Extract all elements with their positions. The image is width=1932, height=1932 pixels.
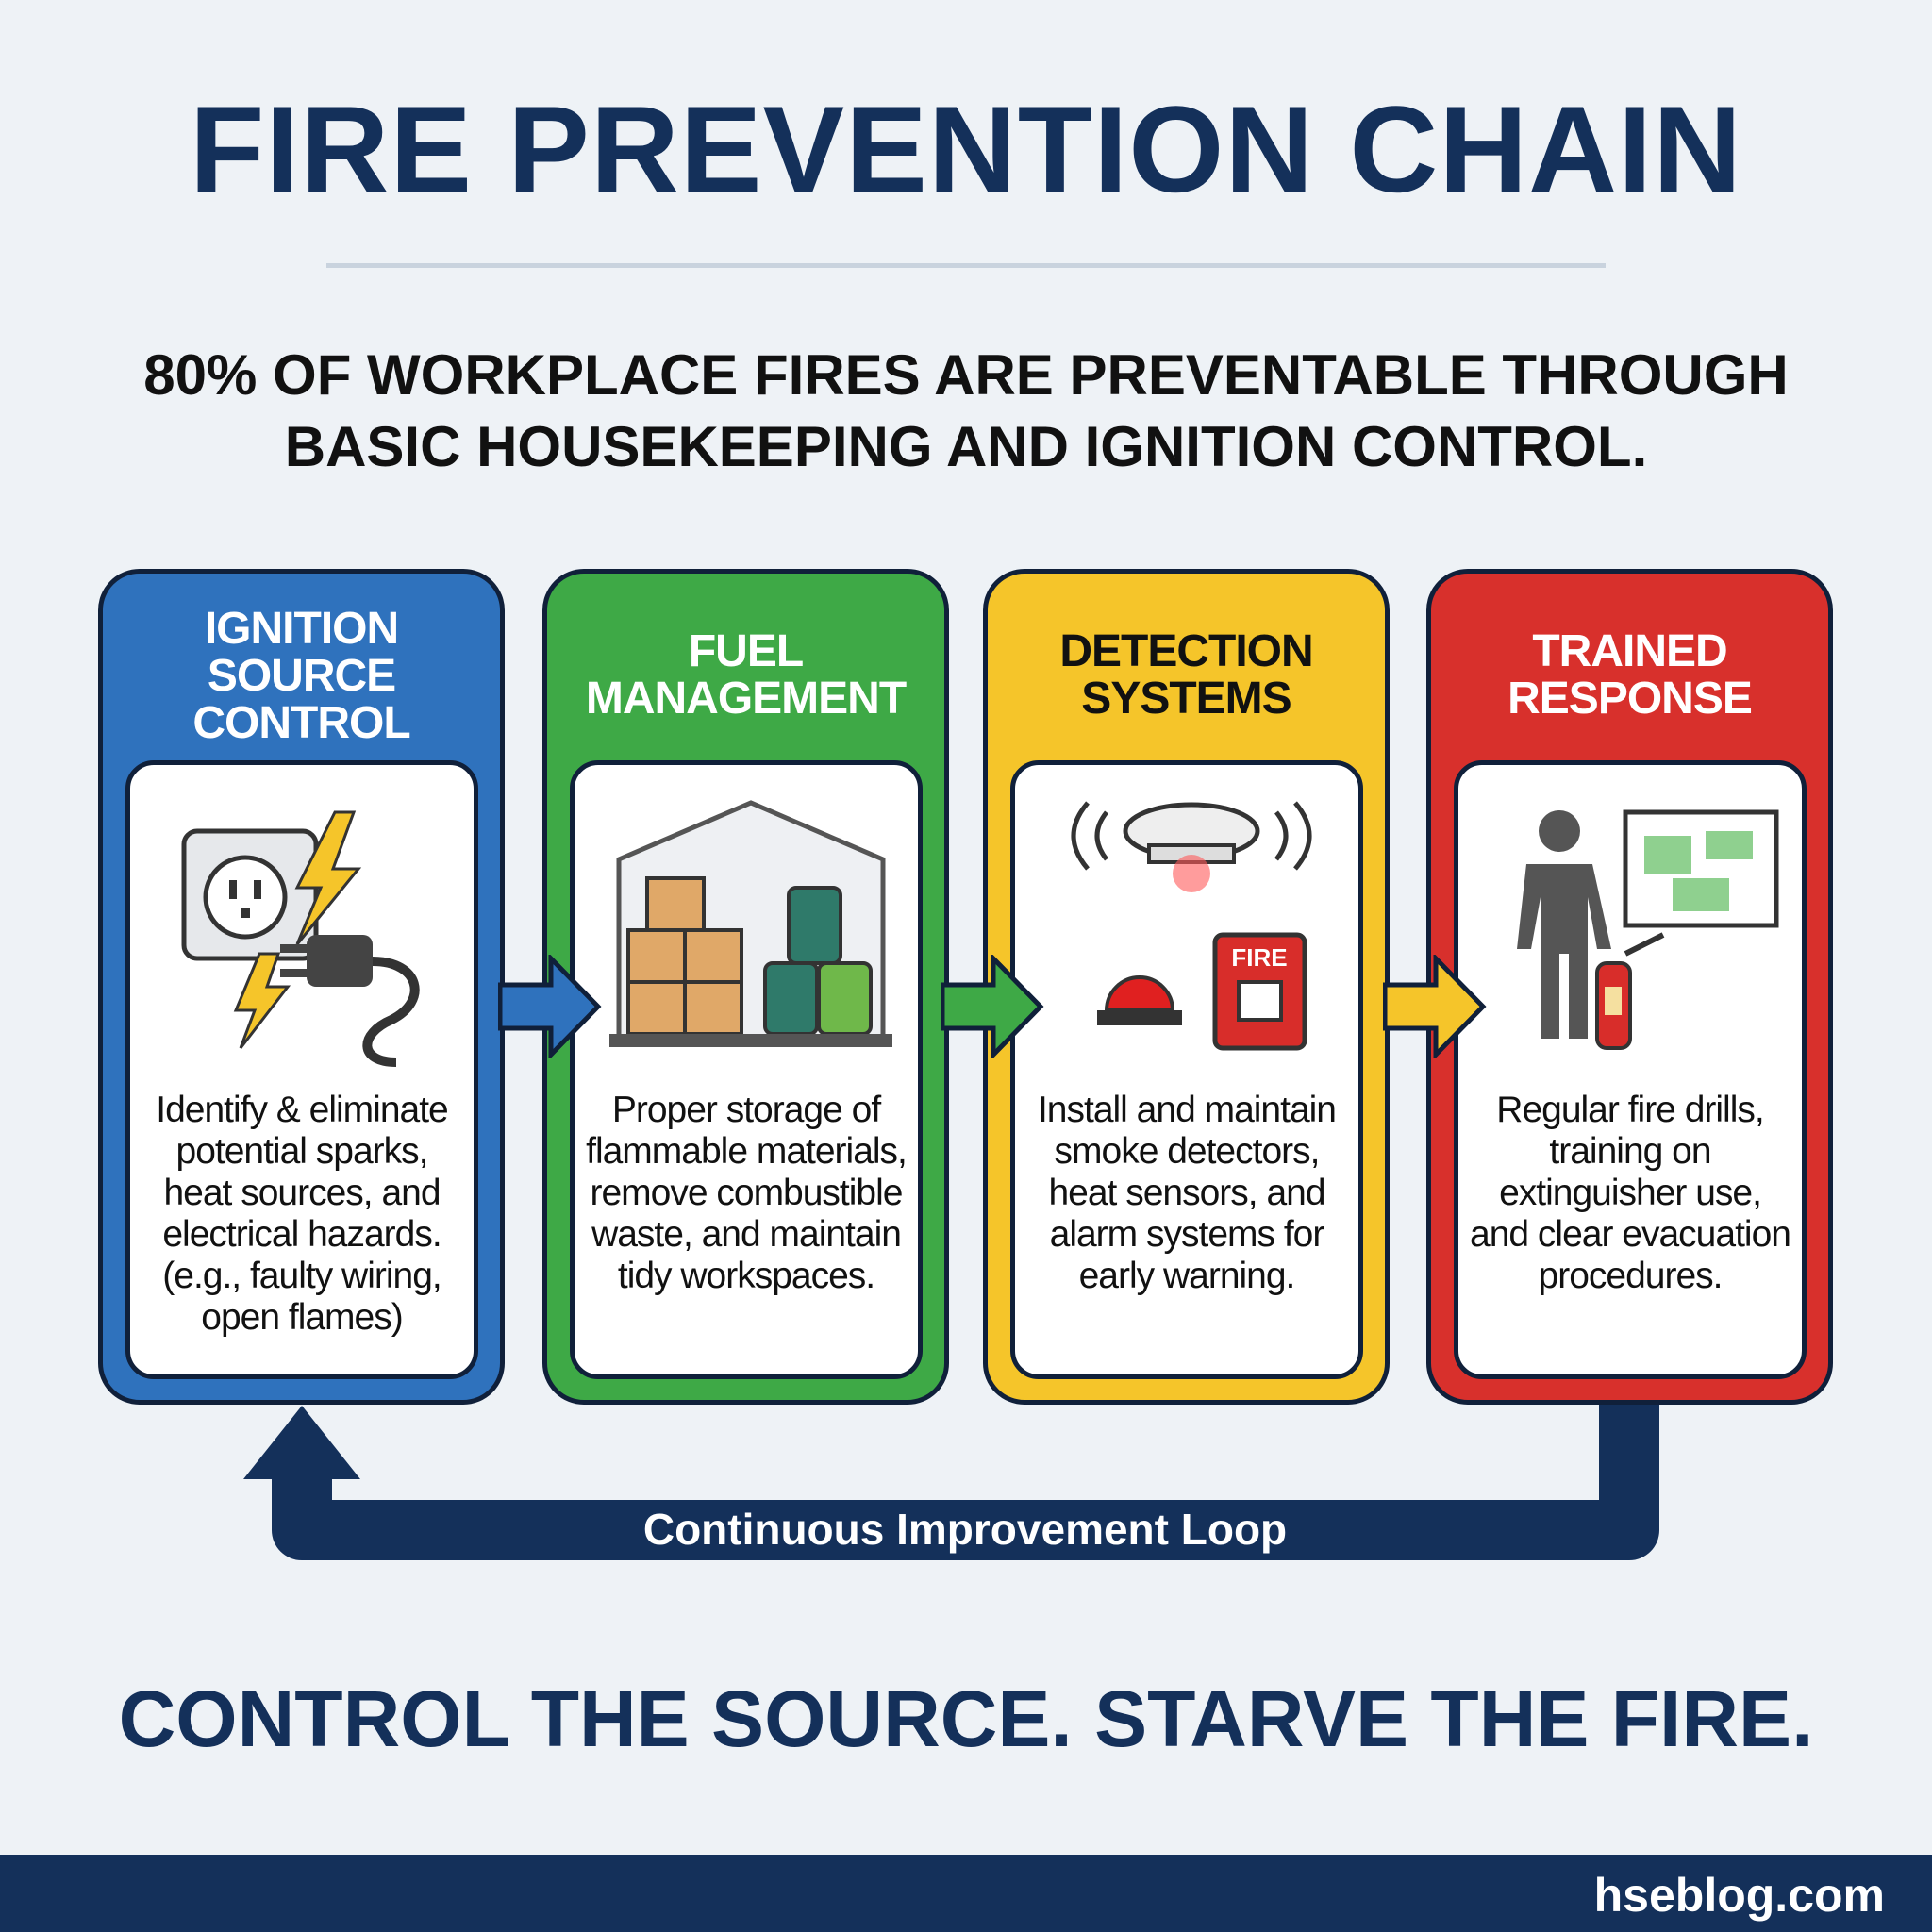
subtitle: 80% OF WORKPLACE FIRES ARE PREVENTABLE THROUGH <box>143 343 1789 407</box>
footer: hseblog.com <box>1594 1869 1885 1922</box>
icon: smoke detector, beacon, fire alarm <box>1071 801 1312 1051</box>
panel: ignition source control: CONTROL <box>192 698 410 748</box>
panel: fuel management <box>542 569 949 1405</box>
panel: fuel management: MANAGEMENT <box>586 674 906 724</box>
text block: Install and maintain smoke detectors, heat sensors, and alarm systems for early warning. <box>1038 1090 1336 1296</box>
panel: ignition source control: IGNITION <box>205 604 398 654</box>
subtitle: BASIC HOUSEKEEPING AND IGNITION CONTROL. <box>285 415 1647 478</box>
icon: warehouse with boxes and drums <box>609 800 892 1047</box>
arrow <box>498 955 602 1058</box>
subtitle <box>143 343 1789 478</box>
icon: smoke detector, beacon, fire alarm: FIRE <box>1231 943 1288 972</box>
panel: ignition source control <box>98 569 505 1405</box>
panel: detection systems: DETECTION <box>1059 626 1313 676</box>
footer <box>0 1855 1932 1932</box>
loop arrow <box>243 1405 1659 1560</box>
slogan: CONTROL THE SOURCE. STARVE THE FIRE. <box>119 1674 1813 1763</box>
loop arrow: Continuous Improvement Loop <box>643 1505 1287 1554</box>
text block: Proper storage of flammable materials, remove combustible waste, and maintain tidy workspaces. <box>586 1090 907 1296</box>
panel: fuel management: FUEL <box>689 626 803 676</box>
text block: Identify & eliminate potential sparks, heat sources, and electrical hazards. (e.g., faulty wiring, open flames) <box>156 1090 448 1338</box>
arrow <box>941 955 1043 1058</box>
panel: ignition source control: SOURCE <box>208 651 395 701</box>
panel: trained response: TRAINED <box>1532 626 1727 676</box>
icon: person with extinguisher and evacuation map <box>1517 809 1779 1050</box>
panel: trained response <box>1426 569 1833 1405</box>
text block: Regular fire drills, training on extinguisher use, and clear evacuation procedures. <box>1470 1090 1790 1296</box>
icon: outlet and plug <box>181 811 420 1067</box>
title: FIRE PREVENTION CHAIN <box>190 80 1742 218</box>
panel: detection systems: SYSTEMS <box>1081 674 1291 724</box>
panel: detection systems <box>983 569 1390 1405</box>
arrow <box>1383 955 1487 1058</box>
panel: trained response: RESPONSE <box>1507 674 1752 724</box>
